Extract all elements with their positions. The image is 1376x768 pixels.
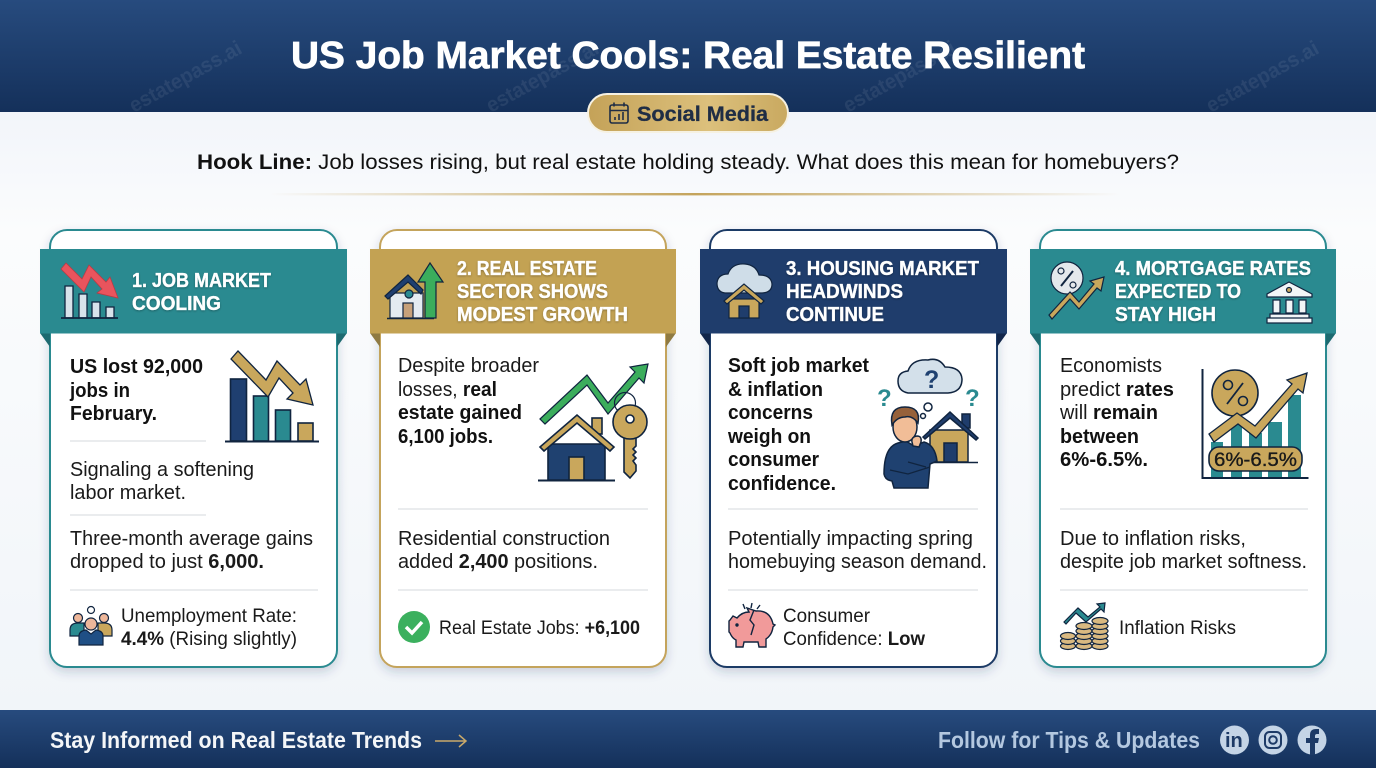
badge: Social Media	[588, 94, 788, 132]
supporting text: Due to inflation risks,	[1060, 528, 1246, 550]
ribbon heading: STAY HIGH	[1115, 304, 1216, 326]
key fact text: confidence.	[728, 473, 836, 495]
key fact text	[398, 355, 539, 448]
key fact text: predict rates	[1060, 379, 1174, 401]
supporting text: Potentially impacting spring	[728, 528, 973, 550]
key fact text: Despite broader	[398, 355, 539, 377]
icon: thinking person and house: ?	[924, 366, 939, 394]
arrow	[435, 735, 466, 747]
supporting text	[398, 528, 610, 573]
key fact text	[69, 356, 203, 425]
header banner: estatepass.ai	[1202, 37, 1323, 117]
footer bar	[0, 710, 1376, 768]
supporting text: Signaling a softening	[70, 459, 254, 481]
key fact text	[727, 355, 869, 495]
supporting text	[1060, 528, 1307, 573]
panel: real estate growth	[370, 230, 676, 667]
key fact text: jobs in	[69, 380, 130, 402]
ribbon heading	[700, 249, 1007, 334]
ribbon heading: COOLING	[132, 293, 221, 315]
icon: coins and arrow	[1060, 603, 1108, 650]
key fact text: & inflation	[728, 379, 823, 401]
footer follow text: Follow for Tips & Updates	[938, 727, 1200, 753]
key fact text: Economists	[1060, 355, 1162, 377]
icon: broken piggy bank	[729, 603, 775, 647]
key fact text: US lost 92,000	[70, 356, 203, 378]
icon: cloud over house	[717, 264, 772, 318]
key fact text: February.	[70, 403, 157, 425]
supporting text: despite job market softness.	[1060, 551, 1307, 573]
icon: people	[70, 606, 112, 645]
supporting text	[70, 459, 313, 573]
icon: bar chart falling arrow	[225, 351, 319, 442]
icon: rate chart: 6%-6.5%	[1214, 450, 1297, 471]
key fact text: 6%-6.5%.	[1060, 449, 1148, 471]
icon: thinking person and house: ?	[965, 385, 980, 412]
key fact text: losses, real	[398, 379, 497, 401]
header banner	[0, 0, 1376, 117]
panel: job market cooling	[40, 230, 347, 667]
ribbon heading: MODEST GROWTH	[457, 304, 628, 326]
ribbon heading: EXPECTED TO	[1115, 281, 1241, 303]
key fact text: between	[1060, 426, 1139, 448]
panel: housing headwinds	[700, 230, 1007, 667]
metric: Unemployment Rate:	[121, 606, 297, 627]
ribbon heading	[1030, 249, 1336, 334]
metric: Confidence: Low	[783, 629, 925, 650]
icon: falling bars red arrow	[61, 263, 118, 318]
icon: percent arrow	[1049, 262, 1104, 319]
icon: Instagram	[1258, 726, 1288, 754]
ribbon heading: SECTOR SHOWS	[457, 281, 608, 303]
key fact text: concerns	[728, 402, 813, 424]
ribbon heading	[40, 249, 347, 334]
supporting text: Three-month average gains	[70, 528, 313, 550]
metric: 4.4% (Rising slightly)	[121, 629, 297, 650]
icon: house key and arrow	[538, 364, 648, 480]
gold divider	[270, 193, 1120, 195]
hook line: Hook Line: Job losses rising, but real estate holding steady. What does this mean for homebuyers?	[197, 151, 1179, 174]
header banner: estatepass.ai	[125, 37, 246, 117]
header banner: estatepass.ai	[839, 37, 960, 117]
icon: bank building	[1267, 282, 1312, 323]
header banner: estatepass.ai	[482, 37, 603, 117]
metric: Consumer	[783, 606, 871, 627]
metric	[121, 606, 297, 650]
key fact text: weigh on	[727, 426, 811, 448]
ribbon heading: 4. MORTGAGE RATES	[1115, 258, 1311, 280]
ribbon heading: CONTINUE	[786, 304, 884, 326]
ribbon heading: 1. JOB MARKET	[132, 270, 271, 292]
key fact text: will remain	[1059, 402, 1158, 424]
icon: thinking person and house	[877, 359, 980, 488]
ribbon heading: HEADWINDS	[786, 281, 903, 303]
key fact text: Soft job market	[728, 355, 869, 377]
supporting text: dropped to just 6,000.	[70, 551, 264, 573]
supporting text: added 2,400 positions.	[398, 551, 598, 573]
supporting text: homebuying season demand.	[728, 551, 987, 573]
key fact text: 6,100 jobs.	[398, 426, 493, 448]
supporting text	[728, 528, 987, 573]
panel: mortgage rates	[1030, 230, 1336, 667]
icon: Facebook	[1298, 726, 1326, 755]
supporting text: Residential construction	[398, 528, 610, 550]
icon: LinkedIn	[1220, 726, 1249, 754]
metric: Inflation Risks	[1119, 618, 1236, 639]
badge: Social Media: Social Media	[637, 103, 768, 126]
icon: house up arrow	[385, 263, 443, 318]
metric: Real Estate Jobs: +6,100	[439, 618, 640, 639]
ribbon heading: 2. REAL ESTATE	[457, 258, 597, 280]
key fact text: estate gained	[398, 402, 522, 424]
ribbon heading	[370, 249, 676, 334]
icon: rate chart	[1202, 369, 1308, 478]
icon: LinkedIn: in	[1225, 730, 1243, 752]
title: US Job Market Cools: Real Estate Resilient	[291, 35, 1085, 77]
footer call to action: Stay Informed on Real Estate Trends	[50, 727, 422, 753]
page background	[0, 112, 1376, 710]
icon: thinking person and house: ?	[877, 385, 892, 412]
metric	[783, 606, 925, 650]
icon: green check	[398, 611, 430, 643]
icon: calendar chart	[610, 102, 628, 123]
key fact text	[1059, 355, 1174, 471]
ribbon heading: 3. HOUSING MARKET	[786, 258, 979, 280]
key fact text: consumer	[728, 449, 819, 471]
supporting text: labor market.	[70, 482, 186, 504]
